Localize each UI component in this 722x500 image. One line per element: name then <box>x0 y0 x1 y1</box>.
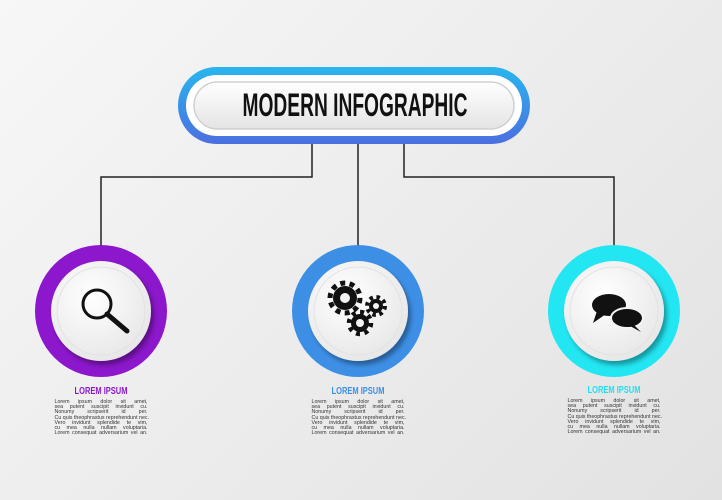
circle: gears <box>292 245 424 377</box>
connector lines <box>101 143 614 246</box>
text block: middle: Lorem ipsum dolor sit amet, <box>312 399 404 405</box>
title pill <box>178 67 530 144</box>
text block: left: cu mea nulla nullam voluptaria. <box>54 425 148 431</box>
text block: right: Nonumy scripserit id per. <box>568 408 660 414</box>
circle: search <box>35 245 167 377</box>
text block: right: LOREM IPSUM <box>588 385 640 396</box>
text block: middle: cu mea nulla nullam voluptaria. <box>312 425 404 431</box>
text block: right: cu mea nulla nullam voluptaria. <box>568 424 660 430</box>
text block: middle: sea putent suscipit invidunt cu. <box>312 404 404 410</box>
icon: gears <box>330 283 385 334</box>
text block: left: sea putent suscipit invidunt cu. <box>54 404 148 410</box>
text block: right: Lorem ipsum dolor sit amet, <box>568 398 660 404</box>
text block: right: sea putent suscipit invidunt cu. <box>568 403 660 409</box>
icon: chat bubbles <box>592 294 643 332</box>
text block: right <box>568 385 662 435</box>
text block: left: LOREM IPSUM <box>75 386 127 397</box>
circle: chat <box>548 245 680 377</box>
text block: right: Cu quis theophrastus reprehendunt nec. <box>568 414 662 420</box>
text block: left: Lorem consequat adversarium vel an. <box>54 430 148 436</box>
title text: MODERN INFOGRAPHIC <box>243 87 467 123</box>
text block: right: Vero invidunt splendide te vim, <box>568 419 660 425</box>
text block: left <box>54 386 149 436</box>
text block: middle: LOREM IPSUM <box>332 386 384 397</box>
icon: magnifier <box>83 290 127 331</box>
text block: left: Nonumy scripserit id per. <box>54 409 148 415</box>
text block: left: Lorem ipsum dolor sit amet, <box>54 399 148 405</box>
text block: middle: Cu quis theophrastus reprehendunt nec. <box>312 415 406 421</box>
text block: middle: Lorem consequat adversarium vel an. <box>312 430 404 436</box>
text block: middle <box>312 386 406 436</box>
text block: middle: Nonumy scripserit id per. <box>312 409 404 415</box>
text block: left: Vero invidunt splendide te vim, <box>54 420 148 426</box>
text block: right: Lorem consequat adversarium vel an. <box>568 429 660 435</box>
text block: middle: Vero invidunt splendide te vim, <box>312 420 404 426</box>
text block: left: Cu quis theophrastus reprehendunt nec. <box>54 415 149 421</box>
